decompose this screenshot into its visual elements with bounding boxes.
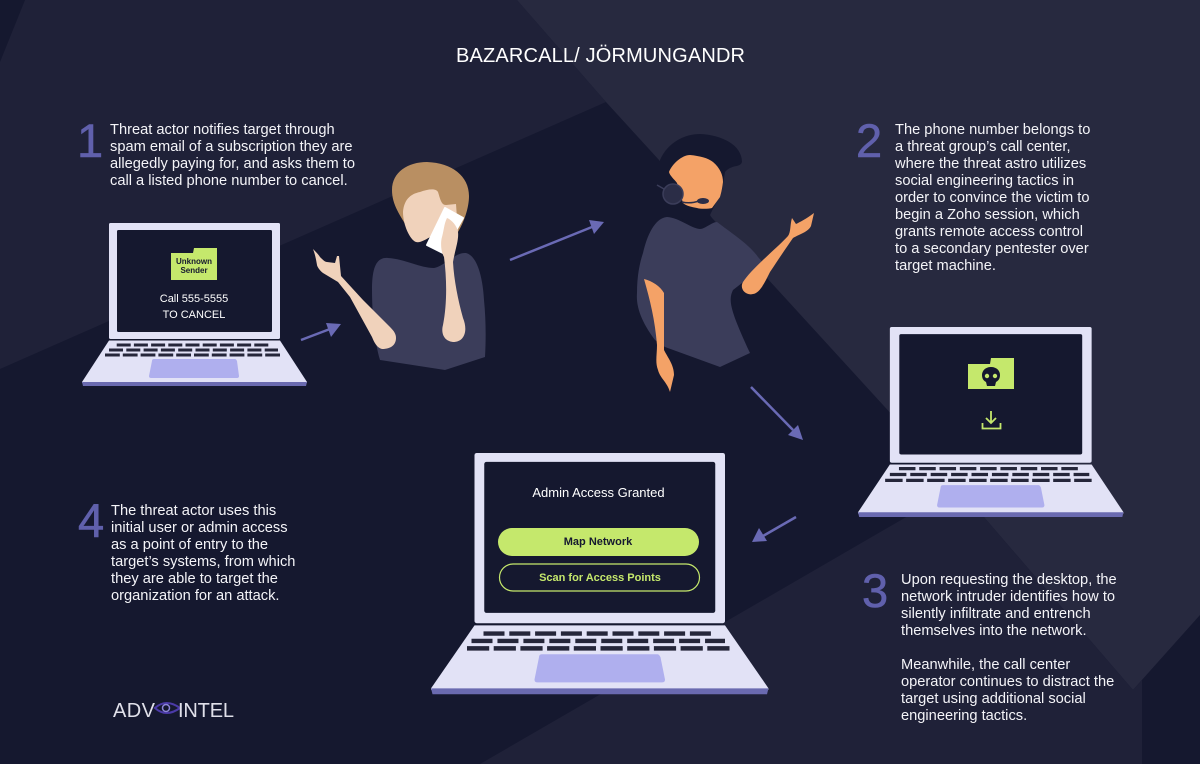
left arm [644,279,674,392]
step 2 text: The phone number belongs to [895,122,1090,138]
step 2 text: grants remote access control [895,224,1083,240]
title: BAZARCALL/ JÖRMUNGANDR [456,45,745,67]
step 1 text: Threat actor notifies target through [110,122,335,138]
step 2 text: begin a Zoho session, which [895,207,1080,223]
step 3 text: Meanwhile, the call center [901,657,1070,673]
step 3 text: network intruder identifies how to [901,589,1115,605]
figure: call center operator [637,134,814,392]
shirt [372,253,486,370]
step 4 text: target’s systems, from which [111,554,295,570]
face [403,189,458,242]
laptop 3: admin access granted [431,453,768,694]
screen message [160,293,228,321]
icon: download [982,411,1000,428]
button: map network [498,528,699,556]
arrow: laptop to target [301,323,341,340]
button: map network: Map Network [564,536,633,548]
step 4 text [111,503,295,604]
step 2 text: order to convince the victim to [895,190,1089,206]
step 1 number: 1 [77,114,103,167]
step 4 text: initial user or admin access [111,520,288,536]
arrow: call center to malware laptop [751,387,803,440]
step 2 text: social engineering tactics in [895,173,1074,189]
step 4 number: 4 [78,494,104,547]
arrow: malware laptop to admin laptop [752,517,796,542]
logo: ADV INTEL: ADV [113,700,156,722]
step 3 text: target using additional social [901,691,1086,707]
button: scan for access points: Scan for Access Points [539,572,661,584]
screen message: Call 555-5555 [160,293,228,305]
step 2 text: target machine. [895,258,996,274]
step 3 text [901,572,1117,724]
screen message: TO CANCEL [163,309,225,321]
screen heading: Admin Access Granted [532,485,665,500]
step 3 text: operator continues to distract the [901,674,1114,690]
step 3 text: Upon requesting the desktop, the [901,572,1117,588]
logo: ADV INTEL: INTEL [178,700,234,722]
step 2 text: to a secondary pentester over [895,241,1089,257]
hair and neck [660,134,742,229]
step 4 text: as a point of entry to the [111,537,268,553]
step 1 text: allegedly paying for, and asks them to [110,156,355,172]
icon: folder with skull [968,358,1014,389]
step 4 text: The threat actor uses this [111,503,276,519]
step 2 number: 2 [856,114,882,167]
logo: ADV INTEL [113,700,234,722]
step 1 text [110,122,355,189]
step 3 text: engineering tactics. [901,708,1027,724]
step 3 text: themselves into the network. [901,623,1087,639]
hair [392,162,469,232]
step 1 text: spam email of a subscription they are [110,139,352,155]
raised arm [313,249,396,349]
button: scan for access points [500,564,700,591]
arrow: target to call center [510,220,604,260]
step 2 text [894,122,1090,274]
step 2 text: a threat group’s call center, [895,139,1071,155]
arm holding phone [441,218,465,342]
headset [657,184,709,204]
phone [427,208,463,253]
step 4 text: organization for an attack. [111,588,279,604]
step 3 text: silently infiltrate and entrench [901,606,1091,622]
right arm [742,213,814,294]
laptop 1: unknown sender email [82,223,307,386]
icon: folder unknown sender [171,248,217,280]
figure: target on the phone [313,162,486,370]
laptop 2: malicious download [858,327,1124,517]
shirt [637,217,765,367]
step 3 number: 3 [862,564,888,617]
face [669,155,723,209]
icon: folder unknown sender: Unknown [176,257,212,266]
step 4 text: they are able to target the [111,571,278,587]
icon: folder unknown sender: Sender [180,266,208,275]
step 2 text: where the threat astro utilizes [894,156,1086,172]
step 1 text: call a listed phone number to cancel. [110,173,348,189]
